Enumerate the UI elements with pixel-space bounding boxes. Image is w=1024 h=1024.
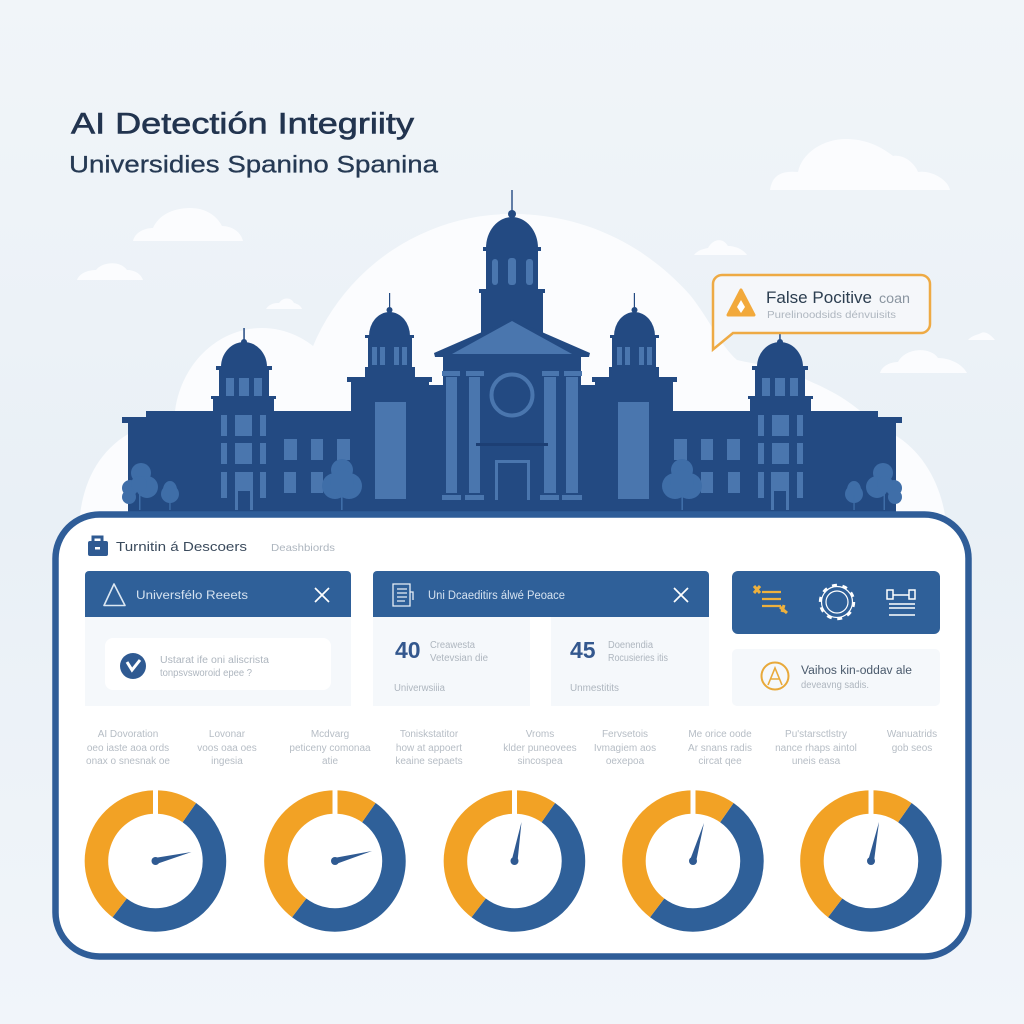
text columns above gauges: oeo iaste aoa ords — [87, 743, 169, 754]
text columns above gauges: Wanuatrids — [887, 729, 937, 740]
stat: 40: Univerwsiiia — [394, 683, 445, 694]
panel: university reports — [85, 571, 351, 706]
callout: false positive: coan — [879, 291, 910, 306]
inner card — [105, 638, 331, 690]
panel: notice card — [732, 649, 940, 706]
gauge 4 — [634, 787, 752, 920]
text columns above gauges: voos oaa oes — [197, 743, 257, 754]
text columns above gauges: gob seos — [892, 743, 932, 754]
inner card: tonpsvsworoid epee ? — [160, 668, 252, 679]
panel: notice card: Vaihos kin-oddav ale — [801, 665, 912, 677]
text columns above gauges: peticeny comonaa — [289, 743, 371, 754]
text columns above gauges: Lovonar — [209, 729, 246, 740]
stat: 45: Doenendia — [608, 640, 653, 651]
text columns above gauges: nance rhaps aintol — [775, 743, 857, 754]
university building illustration — [122, 190, 902, 512]
stat: 45: 45 — [570, 637, 596, 663]
title — [69, 108, 439, 178]
text columns above gauges: circat qee — [698, 756, 742, 767]
callout: false positive — [713, 275, 930, 350]
text columns above gauges: Toniskstatitor — [400, 729, 459, 740]
central hall — [434, 190, 590, 512]
trees — [122, 459, 362, 510]
stat: 40: Creawesta — [430, 640, 475, 651]
icon: document — [393, 584, 413, 606]
icon: gear — [820, 585, 854, 619]
text columns above gauges: Ar snans radis — [688, 743, 752, 754]
callout: false positive: False Pocitive — [766, 289, 872, 307]
stat: 40 — [394, 637, 488, 694]
dashboard header — [88, 537, 335, 556]
text columns above gauges: Mcdvarg — [311, 729, 349, 740]
text columns above gauges: onax o snesnak oe — [86, 756, 170, 767]
right wing mirrored — [576, 293, 902, 512]
text columns above gauges: Pu'starsctlstry — [785, 729, 847, 740]
inner card: Ustarat ife oni aliscrista — [160, 655, 269, 666]
stat: 40: 40 — [395, 637, 421, 663]
clouds — [77, 139, 995, 373]
icon: close — [674, 588, 688, 602]
text columns above gauges: ingesia — [211, 756, 243, 767]
left wing with tower — [122, 293, 448, 512]
text columns above gauges: how at appoert — [396, 743, 462, 754]
gauge 2 — [276, 787, 394, 920]
text columns above gauges: Vroms — [526, 729, 554, 740]
text columns above gauges: Ivmagiem aos — [594, 743, 656, 754]
gauge 5 — [812, 787, 930, 920]
title: Universidies Spanino Spanina — [69, 152, 439, 178]
icon: close — [315, 588, 329, 602]
white hills behind the campus — [80, 214, 945, 646]
icon: settings lines — [887, 590, 915, 615]
text columns above gauges: Fervsetois — [602, 729, 648, 740]
panel: notice card: deveavng sadis. — [801, 680, 869, 691]
dashboard header: Deashbiords — [271, 542, 335, 554]
stat: 45: Unmestitits — [570, 683, 619, 694]
title: AI Detectión Integriity — [71, 108, 414, 140]
text columns above gauges: keaine sepaets — [395, 756, 463, 767]
gauge 1 — [96, 787, 214, 920]
icon: warning outline — [104, 584, 125, 606]
stat: 40: Vetevsian die — [430, 653, 488, 664]
panel: tools — [732, 571, 940, 634]
text columns above gauges: atie — [322, 756, 338, 767]
text columns above gauges — [86, 729, 937, 767]
panel: university reports: Universfélo Reeets — [136, 590, 248, 602]
gauge 3 — [455, 787, 573, 920]
stat: 45: Rocusieries itis — [608, 653, 668, 664]
stat: 45 — [570, 637, 668, 694]
text columns above gauges: AI Dovoration — [98, 729, 158, 740]
text columns above gauges: uneis easa — [792, 756, 841, 767]
panel: university statistics: Uni Dcaeditirs álwé Peoace — [428, 590, 565, 602]
text columns above gauges: klder puneovees — [503, 743, 577, 754]
panel: university statistics — [373, 571, 709, 706]
text columns above gauges: sincospea — [517, 756, 563, 767]
icon: briefcase lock — [88, 537, 108, 556]
dashboard panel — [56, 514, 968, 956]
icon: warning triangle — [728, 290, 754, 315]
icon: lines with stars — [754, 586, 787, 613]
tower two — [351, 380, 429, 512]
dashboard header: Turnitin á Descoers — [116, 539, 248, 554]
callout: false positive: Purelinoodsids dénvuisits — [767, 309, 896, 321]
text columns above gauges: oexepoa — [606, 756, 645, 767]
text columns above gauges: Me orice oode — [688, 729, 752, 740]
